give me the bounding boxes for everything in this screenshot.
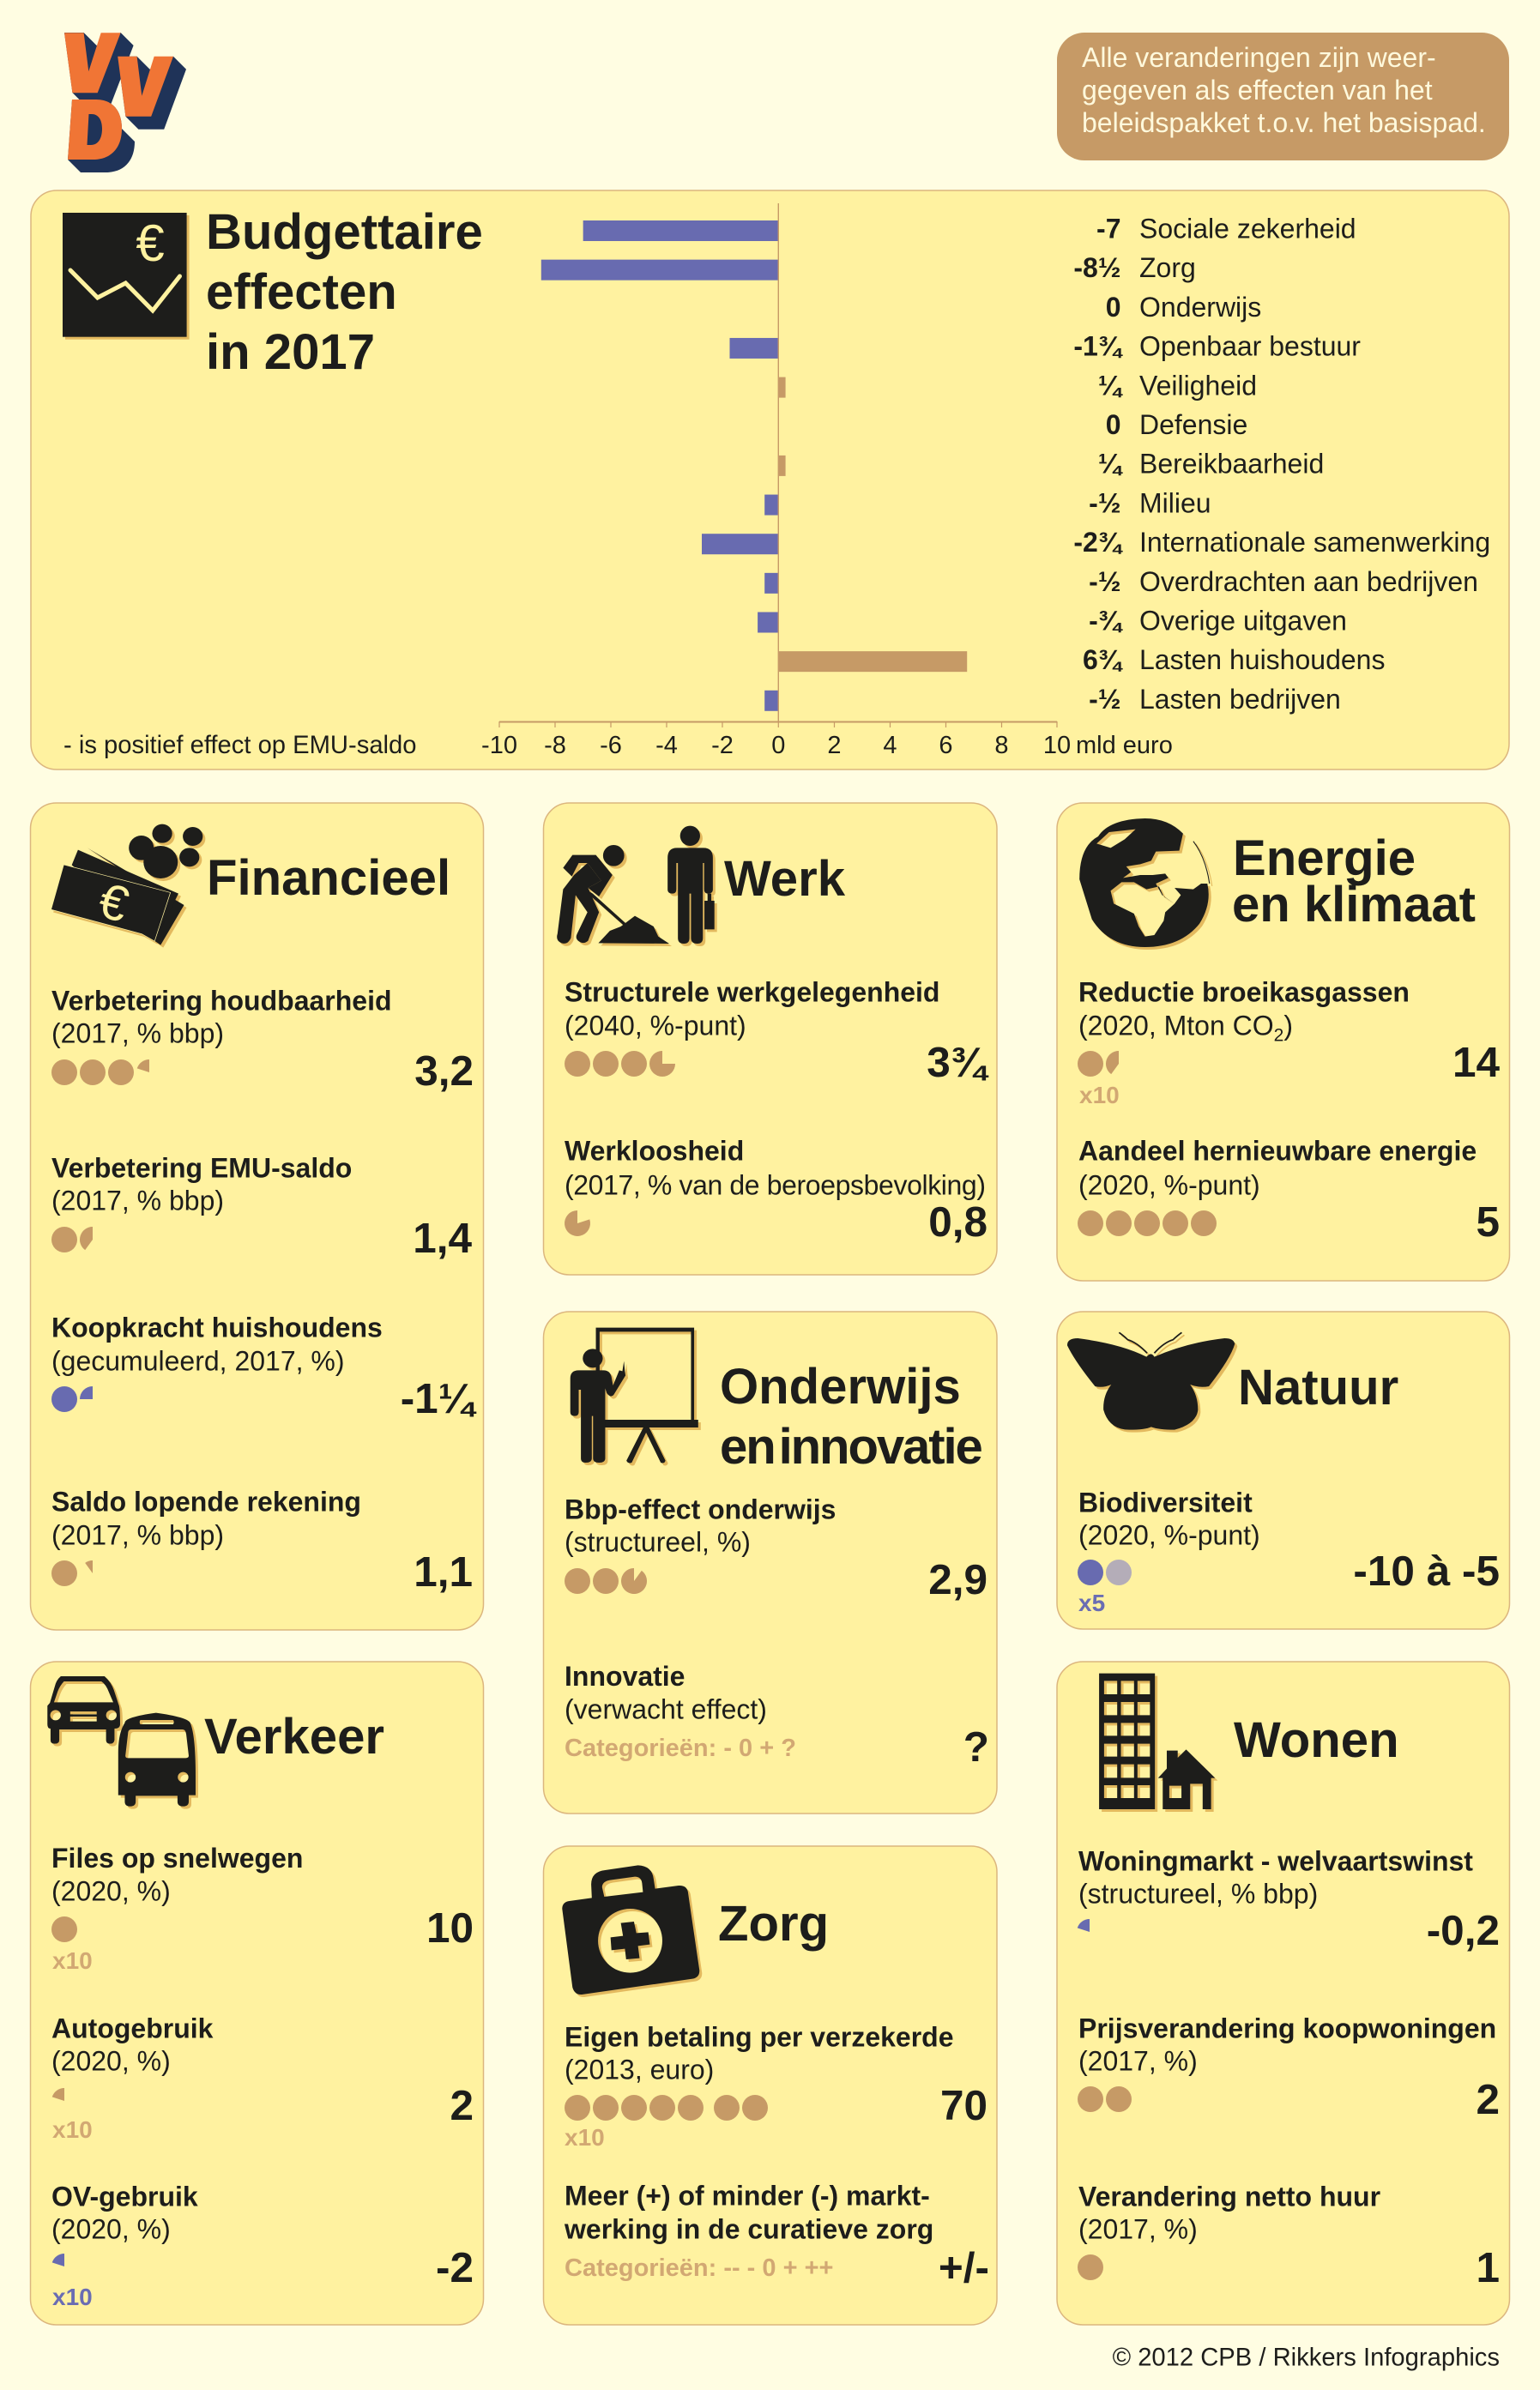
item: prijsverandering koopwoningen: 2 xyxy=(1476,2076,1500,2123)
item: eigen betaling: 70 xyxy=(940,2082,987,2129)
panel: onderwijs en innovatie xyxy=(544,1312,997,1814)
category labels: Lasten huishoudens xyxy=(1139,644,1385,675)
icon: money xyxy=(51,824,202,945)
item: reductie broeikasgassen: 14 xyxy=(1452,1039,1500,1086)
item: koopkracht huishoudens: -1¼ xyxy=(401,1375,477,1422)
item: aandeel hernieuwbare energie: (2020, %-punt) xyxy=(1078,1170,1260,1201)
heading: onderwijs en innovatie: en innovatie xyxy=(720,1419,982,1475)
item: marktwerking: werking in de curatieve zorg xyxy=(564,2213,933,2244)
pictogram: 1,4 xyxy=(51,1227,93,1252)
icon: car and bus xyxy=(47,1676,196,1807)
heading: budgettaire effecten in 2017 xyxy=(206,204,483,380)
item: innovatie: Innovatie xyxy=(565,1661,685,1692)
icon: teacher xyxy=(571,1328,698,1463)
pictogram: 70 xyxy=(565,2095,768,2121)
axis labels: 4 xyxy=(883,732,897,759)
item: saldo lopende rekening: (2017, % bbp) xyxy=(51,1520,224,1551)
item: bbp-effect onderwijs xyxy=(565,1494,987,1603)
item: bbp-effect onderwijs: Bbp-effect onderwijs xyxy=(565,1494,836,1525)
axis labels: 2 xyxy=(827,732,842,759)
note: sign convention: - is positief effect op EMU-saldo xyxy=(63,732,417,759)
item: biodiversiteit: Biodiversiteit xyxy=(1078,1488,1253,1518)
item: saldo lopende rekening: Saldo lopende rekening xyxy=(51,1486,361,1517)
item: reductie broeikasgassen: Reductie broeikasgassen xyxy=(1078,976,1410,1007)
item: verbetering houdbaarheid: Verbetering houdbaarheid xyxy=(51,985,392,1016)
axis labels: -8 xyxy=(544,732,566,759)
pictogram: -0,2 xyxy=(1078,1919,1090,1932)
item: verandering netto huur: (2017, %) xyxy=(1078,2213,1198,2244)
heading: energie en klimaat: en klimaat xyxy=(1232,877,1476,932)
item: prijsverandering koopwoningen xyxy=(1078,2013,1500,2123)
category labels: Zorg xyxy=(1139,252,1196,283)
pictogram: -1 1/4 xyxy=(51,1386,93,1412)
value column: -½ xyxy=(1089,566,1120,597)
item: woningmarkt: -0,2 xyxy=(1427,1907,1500,1954)
item: innovatie: ? xyxy=(963,1723,989,1771)
icon: buildings xyxy=(1099,1674,1215,1809)
item: eigen betaling: x10 xyxy=(565,2124,605,2151)
axis labels: -10 xyxy=(481,732,517,759)
bar chart xyxy=(499,203,1057,727)
value column: -7 xyxy=(1096,213,1120,244)
item: woningmarkt: (structureel, % bbp) xyxy=(1078,1879,1318,1910)
item: reductie broeikasgassen: (2020, Mton CO xyxy=(1078,1011,1274,1041)
item: verbetering houdbaarheid xyxy=(51,985,474,1095)
icon: money: € xyxy=(93,872,135,933)
heading: natuur: Natuur xyxy=(1238,1360,1398,1415)
pictogram: 1 xyxy=(1078,2254,1103,2280)
callout: note: beleidspakket t.o.v. het basispad. xyxy=(1082,107,1486,138)
item: verbetering EMU-saldo xyxy=(51,1153,472,1262)
category labels: Openbaar bestuur xyxy=(1139,331,1361,362)
credit: © 2012 CPB / Rikkers Infographics xyxy=(1113,2344,1500,2371)
icon: globe xyxy=(1079,818,1210,947)
callout: note: gegeven als effecten van het xyxy=(1082,75,1433,106)
pictogram: -2 xyxy=(52,2254,64,2266)
heading: zorg: Zorg xyxy=(718,1896,829,1952)
item: reductie broeikasgassen: 2 xyxy=(1274,1026,1283,1045)
icon: first aid case xyxy=(562,1865,699,1995)
panel: verkeer xyxy=(31,1662,484,2325)
item: biodiversiteit: (2020, %-punt) xyxy=(1078,1520,1260,1551)
value column: 0 xyxy=(1106,409,1120,440)
category labels: Sociale zekerheid xyxy=(1139,213,1356,244)
item: innovatie: Categorieën: - 0 + ? xyxy=(565,1735,796,1762)
item: verandering netto huur: Verandering netto huur xyxy=(1078,2181,1380,2212)
pictogram: 10 xyxy=(51,1916,77,1942)
item: aandeel hernieuwbare energie xyxy=(1078,1136,1500,1246)
item: saldo lopende rekening xyxy=(51,1486,473,1596)
value column: 0 xyxy=(1106,292,1120,323)
icon: euro chart: € xyxy=(136,214,165,272)
value column: -2¾ xyxy=(1073,527,1123,558)
axis labels: mld euro xyxy=(1076,732,1173,759)
item: marktwerking: Meer (+) of minder (-) markt- xyxy=(565,2181,930,2212)
callout: note: Alle veranderingen zijn weer- xyxy=(1082,42,1436,73)
item: werkloosheid: (2017, % van de beroepsbevolking) xyxy=(565,1170,986,1201)
item: files op snelwegen: x10 xyxy=(52,1947,93,1974)
heading: financieel: Financieel xyxy=(207,850,450,906)
heading: energie en klimaat: Energie xyxy=(1233,830,1416,886)
panel: budgettaire effecten xyxy=(31,190,1509,770)
item: files op snelwegen xyxy=(51,1843,474,1974)
item: biodiversiteit: x5 xyxy=(1078,1590,1105,1616)
item: files op snelwegen: Files op snelwegen xyxy=(51,1843,303,1874)
pictogram: 1,1 xyxy=(51,1560,93,1586)
logo: VVD xyxy=(64,33,186,172)
panel: energie en klimaat xyxy=(1057,803,1510,1281)
axis labels: -2 xyxy=(711,732,734,759)
item: autogebruik: Autogebruik xyxy=(51,2013,214,2043)
item: eigen betaling: (2013, euro) xyxy=(565,2054,714,2085)
panel: zorg xyxy=(544,1846,997,2325)
item: koopkracht huishoudens: (gecumuleerd, 2017, %) xyxy=(51,1345,345,1376)
pictogram: 5 xyxy=(1078,1210,1217,1236)
item: ov-gebruik xyxy=(51,2181,474,2310)
category labels: Defensie xyxy=(1139,409,1247,440)
item: autogebruik xyxy=(51,2013,474,2143)
heading: wonen: Wonen xyxy=(1234,1712,1399,1768)
item: autogebruik: 2 xyxy=(450,2082,474,2129)
category labels: Veiligheid xyxy=(1139,370,1257,401)
item: ov-gebruik: OV-gebruik xyxy=(51,2181,198,2212)
item: bbp-effect onderwijs: (structureel, %) xyxy=(565,1527,751,1558)
item: structurele werkgelegenheid xyxy=(565,976,989,1086)
axis labels: 6 xyxy=(939,732,953,759)
heading: werk: Werk xyxy=(724,851,846,907)
category labels: Onderwijs xyxy=(1139,292,1261,323)
item: verbetering houdbaarheid: 3,2 xyxy=(414,1047,474,1095)
callout: note xyxy=(1057,33,1509,160)
item: ov-gebruik: (2020, %) xyxy=(51,2213,171,2244)
item: biodiversiteit xyxy=(1078,1488,1500,1616)
item: werkloosheid: 0,8 xyxy=(928,1198,987,1246)
item: reductie broeikasgassen: x10 xyxy=(1079,1082,1120,1108)
category labels: Overdrachten aan bedrijven xyxy=(1139,566,1478,597)
item: verbetering EMU-saldo: (2017, % bbp) xyxy=(51,1186,224,1216)
item: ov-gebruik: -2 xyxy=(436,2244,474,2291)
item: reductie broeikasgassen: ) xyxy=(1283,1011,1293,1041)
category labels: Internationale samenwerking xyxy=(1139,527,1490,558)
panel: werk xyxy=(544,803,997,1275)
icon: workers xyxy=(557,826,715,944)
heading: verkeer: Verkeer xyxy=(204,1709,384,1765)
value column: ¼ xyxy=(1098,370,1123,401)
item: files op snelwegen: (2020, %) xyxy=(51,1875,171,1906)
value column: ¼ xyxy=(1098,449,1123,480)
heading: budgettaire effecten in 2017: Budgettaire xyxy=(206,204,483,260)
item: woningmarkt: Woningmarkt - welvaartswinst xyxy=(1078,1846,1473,1877)
pictogram: -10 tot -5 xyxy=(1078,1560,1132,1585)
item: structurele werkgelegenheid: (2040, %-punt) xyxy=(565,1011,746,1041)
value column: -½ xyxy=(1089,487,1120,518)
axis labels: 10 xyxy=(1043,732,1071,759)
value column: -¾ xyxy=(1089,606,1123,637)
panel: natuur xyxy=(1057,1312,1510,1629)
item: verbetering EMU-saldo: Verbetering EMU-saldo xyxy=(51,1153,352,1184)
item: koopkracht huishoudens xyxy=(51,1313,477,1422)
axis labels: -4 xyxy=(655,732,678,759)
item: structurele werkgelegenheid: Structurele werkgelegenheid xyxy=(565,976,939,1007)
item: autogebruik: (2020, %) xyxy=(51,2045,171,2076)
category labels: Lasten bedrijven xyxy=(1139,684,1341,715)
heading: onderwijs en innovatie: Onderwijs xyxy=(720,1359,961,1415)
pictogram: 2 xyxy=(1078,2086,1132,2112)
icon: butterfly xyxy=(1067,1332,1235,1430)
panel: financieel xyxy=(31,803,484,1630)
value column: -½ xyxy=(1089,684,1120,715)
item: verandering netto huur: 1 xyxy=(1476,2244,1500,2291)
item: marktwerking: Categorieën: -- - 0 + ++ xyxy=(565,2254,833,2282)
item: eigen betaling xyxy=(565,2021,987,2151)
pictogram: 2 xyxy=(52,2088,64,2101)
category labels: Overige uitgaven xyxy=(1139,606,1347,637)
item: structurele werkgelegenheid: 3¾ xyxy=(927,1039,989,1086)
item: verbetering EMU-saldo: 1,4 xyxy=(413,1215,472,1262)
pictogram: 2,9 xyxy=(565,1568,647,1594)
item: saldo lopende rekening: 1,1 xyxy=(414,1548,473,1596)
item: ov-gebruik: x10 xyxy=(52,2284,93,2310)
item: koopkracht huishoudens: Koopkracht huishoudens xyxy=(51,1313,383,1343)
item: innovatie xyxy=(565,1661,989,1771)
pictogram: 3,2 xyxy=(51,1059,149,1085)
panel: wonen xyxy=(1057,1662,1510,2325)
item: werkloosheid xyxy=(565,1136,987,1246)
axis labels: 8 xyxy=(994,732,1009,759)
category labels xyxy=(1139,213,1490,715)
icon: euro chart xyxy=(63,213,190,340)
item: werkloosheid: Werkloosheid xyxy=(565,1136,744,1167)
pictogram: 3 3/4 xyxy=(565,1051,675,1077)
item: marktwerking: +/- xyxy=(939,2244,989,2291)
axis labels: -6 xyxy=(600,732,622,759)
heading: energie en klimaat xyxy=(1232,830,1476,932)
axis labels: 0 xyxy=(771,732,785,759)
category labels: Milieu xyxy=(1139,487,1211,518)
heading: budgettaire effecten in 2017: effecten xyxy=(206,264,397,320)
item: eigen betaling: Eigen betaling per verzekerde xyxy=(565,2021,954,2052)
category labels: Bereikbaarheid xyxy=(1139,449,1324,480)
pictogram: 0,8 xyxy=(565,1210,590,1236)
value column: -8½ xyxy=(1073,252,1120,283)
item: files op snelwegen: 10 xyxy=(426,1904,474,1952)
item: aandeel hernieuwbare energie: 5 xyxy=(1476,1198,1500,1246)
pictogram: 14 xyxy=(1078,1051,1119,1077)
axis labels xyxy=(481,732,1173,759)
item: biodiversiteit: -10 à -5 xyxy=(1353,1548,1500,1595)
item: verbetering houdbaarheid: (2017, % bbp) xyxy=(51,1017,224,1048)
value column: -1¾ xyxy=(1073,331,1123,362)
item: bbp-effect onderwijs: 2,9 xyxy=(928,1556,987,1603)
heading: budgettaire effecten in 2017: in 2017 xyxy=(206,324,375,380)
item: woningmarkt xyxy=(1078,1846,1500,1954)
item: aandeel hernieuwbare energie: Aandeel hernieuwbare energie xyxy=(1078,1136,1477,1167)
heading: onderwijs en innovatie xyxy=(720,1359,982,1475)
item: reductie broeikasgassen xyxy=(1078,976,1500,1108)
item: autogebruik: x10 xyxy=(52,2116,93,2143)
item: prijsverandering koopwoningen: Prijsverandering koopwoningen xyxy=(1078,2013,1496,2043)
item: verandering netto huur xyxy=(1078,2181,1500,2291)
value column: 6¾ xyxy=(1083,644,1123,675)
value column xyxy=(1073,213,1123,715)
item: marktwerking xyxy=(564,2181,989,2291)
item: innovatie: (verwacht effect) xyxy=(565,1693,767,1724)
item: prijsverandering koopwoningen: (2017, %) xyxy=(1078,2045,1198,2076)
